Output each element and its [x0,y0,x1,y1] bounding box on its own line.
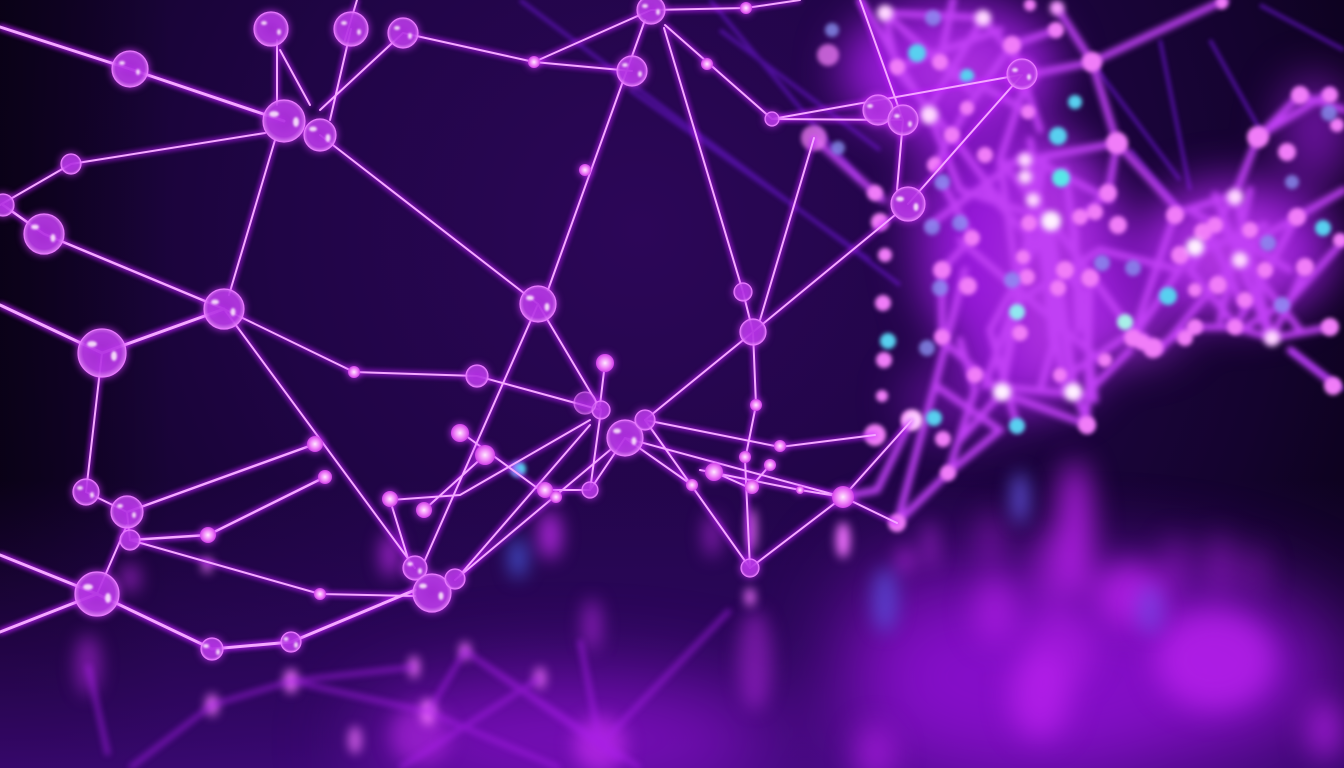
faint background lines [520,0,1344,390]
main network: glass highlights [31,4,1031,655]
floor surface [0,480,1344,768]
right cluster: cyan and blue nodes [510,10,1337,477]
main network: glass nodes [0,0,1037,660]
main network: connecting lines [0,0,1022,649]
right cluster: diffuse glow [840,0,1344,440]
right cluster: strands [814,0,1344,523]
dark left edge [0,0,170,768]
main network: small glowing beads [200,2,854,600]
floor reflections [76,460,1343,768]
right cluster: white-hot dots [877,1,1280,429]
right cluster: glowing dots [801,0,1344,532]
